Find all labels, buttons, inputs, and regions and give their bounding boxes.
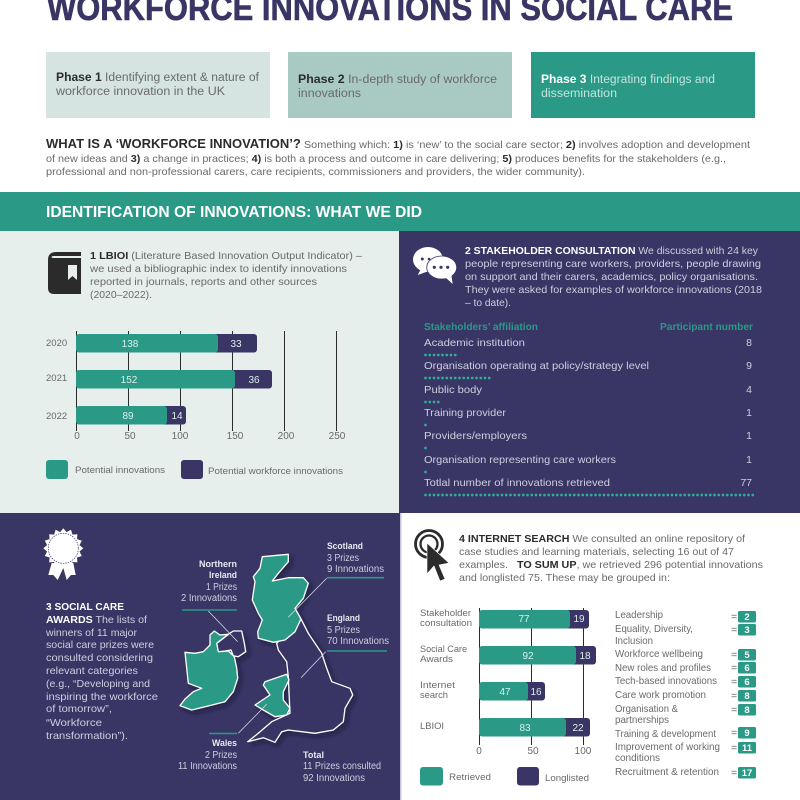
icon: speech bubbles [413,247,457,284]
map label: England [327,613,389,647]
bar chart: retrieved and longlisted by source: 92 [522,651,534,662]
panel: phase 1: Phase 1 Identifying extent & nature of [56,72,260,84]
list: innovation categories with counts: Tech-based innovations [615,675,717,687]
list: innovation categories with counts: New roles and profiles [615,662,711,674]
bar chart: retrieved and longlisted by source: LBIOI [420,721,444,732]
table: stakeholders' affiliation: Training provider [424,407,507,419]
bar chart: retrieved and longlisted by source: Internet [420,680,455,691]
bar chart: innovations by year: 0 [74,431,80,442]
text block: internet search description: case studies and learning materials, selecting 16 out of 47 [459,546,734,558]
bar chart: retrieved and longlisted by source: 0 [476,746,482,757]
table: stakeholders' affiliation: 77 [740,477,752,489]
panel: phase 3: Phase 3 Integrating findings and [541,74,715,86]
bar chart: innovations by year: 14 [171,411,183,422]
list: innovation categories with counts: Recruitment & retention [615,766,719,778]
table: stakeholders' affiliation: Public body [424,384,483,396]
bar chart: innovations by year: 100 [172,431,189,442]
bar chart: retrieved and longlisted by source: 100 [575,746,592,757]
map label: Wales: 11 Innovations [178,761,237,772]
text block: LBIOI description: 1 LBIOI (Literature Based Innovation Output Indicator) – [90,250,362,262]
list: innovation categories with counts: Training & development [615,728,716,740]
text block: definition of workforce innovation: professional and non-professional carers, care recipients, commissioners and providers, the wider community). [46,166,585,178]
text block: stakeholder description: – to date). [465,297,511,309]
list: innovation categories with counts: 3 [744,625,750,636]
map label: England: 5 Prizes [327,625,360,636]
list: innovation categories with counts: 5 [744,650,750,661]
list: innovation categories with counts: 6 [744,663,750,674]
text block: LBIOI description: (2020–2022). [90,289,152,301]
legend: LBIOI chart: Potential workforce innovations [208,466,343,477]
bar chart: innovations by year: 250 [329,431,346,442]
text block: awards description: (e.g., “Developing and [46,678,150,690]
bar chart: innovations by year: 152 [121,375,138,386]
map label: Scotland: 3 Prizes [327,553,359,564]
list: innovation categories with counts: 17 [742,768,752,779]
heading band [0,192,800,231]
bar chart: retrieved and longlisted by source: 16 [530,687,542,698]
list: innovation categories with counts [615,609,756,779]
legend: source chart [420,767,589,786]
text block: awards description: relevant categories [46,665,138,677]
map region: Wales [255,674,290,717]
text block: awards description: AWARDS The lists of [46,614,147,626]
text block: awards description: winners of 11 major [45,627,137,639]
map label: Total: Total [303,750,324,761]
map label: Wales: 2 Prizes [205,750,237,761]
table: stakeholders' affiliation: Stakeholders’ affiliation [424,321,538,333]
list: innovation categories with counts: Organisation & [615,703,678,715]
panel: phase 2 [288,52,512,118]
map region: Republic of Ireland [180,631,238,710]
bar chart: retrieved and longlisted by source: 77 [518,614,530,625]
map label: Scotland: 9 Innovations [327,564,384,575]
list: innovation categories with counts: Equality, Diversity, [615,623,693,635]
text block: LBIOI description [89,250,362,301]
panel: 1 LBIOI [0,231,399,513]
list: innovation categories with counts: 9 [744,728,750,739]
text block: stakeholder description [465,245,762,309]
panel: phase 1: workforce innovation in the UK [55,86,225,98]
list: innovation categories with counts: conditions [615,752,660,764]
list: innovation categories with counts: = [731,676,737,688]
table: stakeholders' affiliation [424,321,753,495]
list: innovation categories with counts: = [731,611,737,623]
text block: stakeholder description: They were asked for examples of workforce innovations (2018 [465,284,762,296]
bar chart: retrieved and longlisted by source: 18 [579,651,591,662]
icon: cursor click [416,530,449,581]
bar chart: retrieved and longlisted by source: 22 [572,723,584,734]
text block: awards description: social care prizes were [46,639,154,651]
list: innovation categories with counts: = [731,704,737,716]
list: innovation categories with counts: = [731,649,737,661]
legend: source chart: Retrieved [449,772,491,783]
text block: awards description [45,601,158,742]
bar chart: retrieved and longlisted by source: 47 [499,687,511,698]
map label: Total [303,750,381,784]
bar chart: innovations by year: 138 [122,339,139,350]
icon: book [48,252,81,294]
panel: 2 stakeholder consultation [399,231,800,513]
table: stakeholders' affiliation: Organisation operating at policy/strategy level [424,360,649,372]
table: stakeholders' affiliation: 9 [746,360,752,372]
list: innovation categories with counts: Improvement of working [615,741,720,753]
bar chart: innovations by year [46,331,346,442]
list: innovation categories with counts: Inclusion [615,635,653,647]
text block: definition of workforce innovation: WHAT IS A ‘WORKFORCE INNOVATION’? Something which: 1) is ‘new’ to the social care sector; 2) involves adoption and development [46,137,750,151]
text block: awards description: consulted considering [46,652,153,664]
map label: Northern Ireland: 1 Prizes [206,582,237,593]
bar chart: retrieved and longlisted by source [420,608,596,757]
table: stakeholders' affiliation: 4 [746,384,752,396]
bar chart: innovations by year: 50 [124,431,136,442]
panel: phase 3 [531,52,755,118]
text block: stakeholder description: 2 STAKEHOLDER CONSULTATION We discussed with 24 key [465,245,759,257]
table: stakeholders' affiliation: 1 [746,407,752,419]
list: innovation categories with counts: 11 [742,743,753,754]
text block: stakeholder description: people representing care workers, providers, people drawing [465,258,761,270]
table: stakeholders' affiliation: 8 [746,337,752,349]
legend: source chart: Longlisted [545,773,589,784]
legend: LBIOI chart: Potential innovations [75,465,165,476]
bar chart: innovations by year: 200 [278,431,295,442]
list: innovation categories with counts: = [731,690,737,702]
list: innovation categories with counts: Care work promotion [615,689,706,701]
bar chart: retrieved and longlisted by source: search [420,690,448,701]
bar chart: innovations by year: 89 [122,411,134,422]
bar chart: retrieved and longlisted by source: Stakeholder [420,608,471,619]
panel: 3 social care awards [0,513,400,800]
text block: stakeholder description: on support and their carers, academics, policy organisations. [465,271,758,283]
table: stakeholders' affiliation: Totlal number of innovations retrieved [424,477,610,489]
list: innovation categories with counts: Workforce wellbeing [615,648,703,660]
map label: Wales [178,738,237,772]
map region: Northern Ireland [217,631,246,657]
map label: Total: 11 Prizes consulted [303,761,381,772]
list: innovation categories with counts: = [731,662,737,674]
panel: phase 1 [46,52,270,118]
bar chart: innovations by year: 2020 [46,338,67,349]
map label: Wales: Wales [212,738,237,749]
map label: Scotland [327,541,384,575]
text block: LBIOI description: we used a bibliographic index to identify innovations [89,263,347,275]
list: innovation categories with counts: = [731,624,737,636]
text block: definition of workforce innovation: of new ideas and 3) a change in practices; 4) is both a process and outcome in care delivering; 5) produces benefits for the stakeholders (e.g., [46,153,726,165]
text block: internet search description: and longlisted 75. These may be grouped in: [459,572,670,584]
list: innovation categories with counts: = [731,727,737,739]
text block: LBIOI description: reported in journals, reports and other sources [90,276,317,288]
bar chart: innovations by year: 36 [248,375,260,386]
table: stakeholders' affiliation: Providers/employers [424,430,527,442]
icon: award rosette [43,528,83,580]
bar chart: retrieved and longlisted by source: consultation [420,618,472,629]
text block: awards description: “Workforce [46,717,102,729]
table: stakeholders' affiliation: Academic institution [424,337,525,349]
panel: phase 2: innovations [298,88,361,100]
map label: England: England [327,613,360,624]
list: innovation categories with counts: = [731,742,737,754]
panel: 4 internet search [400,513,800,800]
legend: LBIOI chart [46,460,343,479]
map label: Northern Ireland: 2 Innovations [181,593,237,604]
map label: Northern Ireland: Ireland [209,570,237,581]
panel: phase 2: Phase 2 In-depth study of workforce [298,74,497,86]
table: stakeholders' affiliation: Participant number [660,321,753,333]
map label: Northern Ireland [181,559,237,604]
text block: awards description: of tomorrow”, [46,703,112,715]
text block: internet search description: examples. TO SUM UP, we retrieved 296 potential innovations [459,559,763,571]
text block: awards description: 3 SOCIAL CARE [46,601,124,613]
text block: internet search description [459,533,763,584]
bar chart: retrieved and longlisted by source: 19 [573,614,585,625]
bar chart: innovations by year: 2021 [46,373,67,384]
table: stakeholders' affiliation: 1 [746,430,752,442]
text block: internet search description: 4 INTERNET SEARCH We consulted an online repository of [459,533,745,545]
map region: England [248,619,353,742]
heading band: IDENTIFICATION OF INNOVATIONS: WHAT WE DID [46,204,422,221]
bar chart: retrieved and longlisted by source: Social Care [420,644,467,655]
bar chart: retrieved and longlisted by source: Awards [420,654,453,665]
map label: Total: 92 Innovations [303,773,365,784]
map label: Northern Ireland: Northern [199,559,237,570]
bar chart: retrieved and longlisted by source: 50 [527,746,539,757]
bar chart: innovations by year: 33 [230,339,242,350]
map label: England: 70 Innovations [327,636,389,647]
list: innovation categories with counts: 6 [744,677,750,688]
list: innovation categories with counts: 8 [744,705,750,716]
map region: Scotland [252,554,308,642]
list: innovation categories with counts: partnerships [615,714,669,726]
map label: Scotland: Scotland [327,541,363,552]
text block: definition of workforce innovation [46,137,750,178]
list: innovation categories with counts: 8 [744,691,750,702]
list: innovation categories with counts: Leadership [615,609,663,621]
text block: awards description: inspiring the workforce [46,691,158,703]
bar chart: innovations by year: 150 [227,431,244,442]
panel: phase 3: dissemination [541,88,617,100]
bar chart: retrieved and longlisted by source: 83 [519,723,531,734]
bar chart: innovations by year: 2022 [46,411,67,422]
list: innovation categories with counts: 2 [744,612,750,623]
map: UK and Ireland [180,554,387,742]
text block: awards description: transformation”). [46,730,128,742]
list: innovation categories with counts: = [731,767,737,779]
table: stakeholders' affiliation: Organisation representing care workers [424,454,616,466]
table: stakeholders' affiliation: 1 [746,454,752,466]
